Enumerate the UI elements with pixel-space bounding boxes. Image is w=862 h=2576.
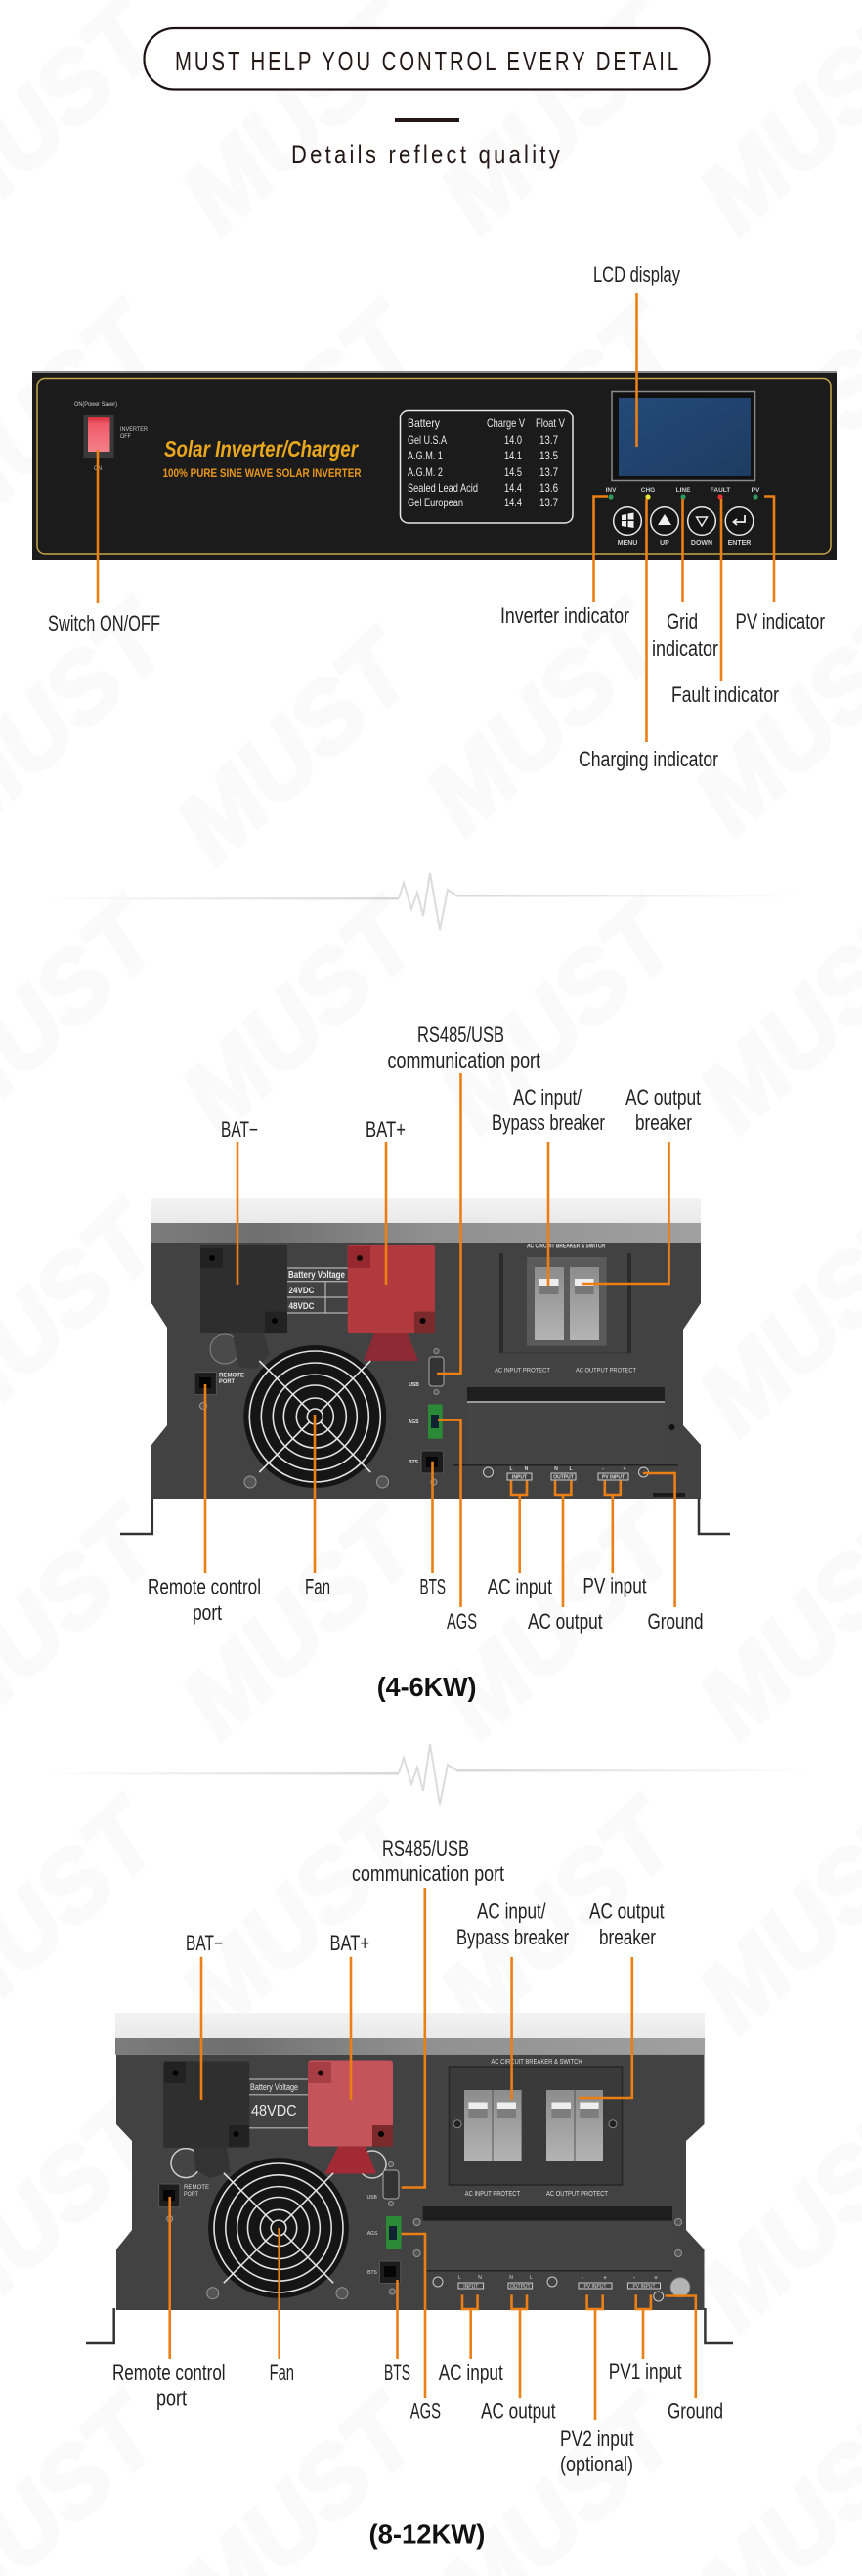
control buttons: DOWN (691, 540, 712, 546)
watermark: repeating MUST logo: MUST (160, 1484, 443, 1758)
status indicators: LINE (676, 487, 691, 494)
watermark: repeating MUST logo: MUST (405, 580, 687, 853)
callout: BAT+: BAT+ (330, 1931, 369, 1955)
AC circuit breaker panel: AC INPUT PROTECT (465, 2191, 521, 2198)
callout: Remote control port: port (193, 1600, 222, 1625)
watermark: repeating MUST logo: MUST (419, 1484, 702, 1758)
callout: Inverter indicator: Inverter indicator (500, 603, 629, 628)
section: 8-12KW inverter rear view (86, 2013, 733, 2343)
heading: 4-6KW: (4-6KW) (377, 1672, 477, 1702)
battery table: Charge V (487, 416, 525, 430)
callout: AC output: AC output (481, 2399, 555, 2423)
callout: PV input: PV input (582, 1574, 647, 1597)
watermark: repeating MUST logo: MUST (160, 1777, 443, 2051)
terminal cover (413, 2206, 682, 2272)
product name: Solar Inverter/Charger (164, 436, 359, 461)
title pill (145, 28, 710, 90)
status indicators: PV (752, 487, 760, 494)
AGS terminal (367, 2216, 402, 2249)
callout: AC output (481, 2294, 555, 2423)
rocker switch: OFF (120, 433, 131, 440)
terminal labels: + (624, 1466, 626, 1472)
BAT+ terminal cover (348, 1245, 435, 1361)
callout: AC input / Bypass breaker: AC input/ (477, 1899, 546, 1924)
terminal labels: + (603, 2275, 607, 2282)
callout: Ground: Ground (668, 2399, 723, 2423)
USB RS485 port: USB (367, 2195, 378, 2201)
battery table: 14.4 (504, 496, 522, 509)
status indicators: INV (606, 487, 617, 494)
terminal labels: N (525, 1466, 529, 1472)
callout: PV2 input (optional): (optional) (560, 2452, 633, 2476)
terminal labels (433, 2275, 690, 2301)
callout: AGS: AGS (447, 1609, 477, 1634)
battery table: 14.1 (504, 449, 522, 462)
terminal labels: PV INPUT (583, 2284, 607, 2290)
callout: LCD display: LCD display (593, 262, 680, 286)
USB RS485 port (409, 1349, 444, 1394)
battery voltage label: Battery Voltage (250, 2082, 298, 2092)
callout: AC input / Bypass breaker: Bypass breaker (456, 1925, 569, 1949)
callout: Charging indicator: Charging indicator (579, 747, 718, 771)
AGS terminal: AGS (409, 1419, 419, 1425)
callout: AC output breaker: AC output (589, 1899, 665, 1924)
callout: BAT+: BAT+ (366, 1117, 406, 1142)
BAT- terminal cover (200, 1245, 287, 1369)
terminal labels: - (582, 2275, 584, 2282)
inverter body (115, 2013, 705, 2310)
AGS terminal (409, 1404, 443, 1439)
callout: BAT-: BAT− (186, 1931, 223, 1955)
callout: AC input / Bypass breaker (492, 1085, 605, 1286)
cooling fan (207, 2158, 349, 2299)
remote port: PORT (219, 1379, 235, 1385)
subtitle: Details reflect quality (291, 140, 563, 169)
BAT+ terminal cover (308, 2061, 393, 2178)
remote port (194, 1373, 244, 1410)
callout: Remote control port (112, 2197, 226, 2411)
callout: AGS: AGS (410, 2399, 441, 2423)
terminal labels: INPUT (512, 1474, 527, 1480)
battery table: 14.4 (504, 481, 522, 495)
callout: Fan: Fan (270, 2360, 294, 2384)
callout: PV1 input (609, 2294, 682, 2383)
terminal labels: PV INPUT (602, 1474, 625, 1480)
callout: AC input / Bypass breaker: Bypass breaker (492, 1111, 605, 1135)
control buttons: UP (660, 540, 669, 546)
callout: RS485/USB communication port: RS485/USB (417, 1023, 504, 1047)
section divider 2 (41, 1744, 813, 1805)
rocker switch: INVERTER (120, 426, 148, 433)
battery table: Battery (408, 416, 440, 430)
control buttons: MENU (618, 540, 637, 546)
callout: AC output breaker (579, 1899, 665, 2098)
watermark: repeating MUST logo: MUST (155, 609, 438, 883)
callout: Remote control port: Remote control (112, 2360, 226, 2384)
BTS port (367, 2261, 401, 2294)
terminal labels: N (509, 2275, 513, 2281)
callout: AC input: AC input (488, 1574, 552, 1599)
battery table: 13.6 (539, 481, 558, 495)
callout: PV indicator (735, 497, 825, 633)
USB RS485 port: USB (409, 1382, 419, 1388)
remote port (159, 2184, 209, 2222)
callout: AC input / Bypass breaker: AC input/ (513, 1085, 582, 1110)
callout: PV2 input (optional) (560, 2294, 633, 2476)
battery voltage label (287, 1268, 348, 1313)
callout: BTS (384, 2280, 410, 2384)
callout: BAT-: BAT− (221, 1117, 258, 1142)
AC circuit breaker panel (495, 1244, 636, 1375)
callout: AC output (528, 1481, 602, 1634)
status indicators (606, 487, 760, 500)
BTS port (409, 1451, 444, 1485)
watermark: repeating MUST logo: MUST (419, 1777, 702, 2051)
callout: RS485/USB communication port: RS485/USB (382, 1836, 469, 1860)
AC circuit breaker panel: AC CIRCUIT BREAKER & SWITCH (527, 1244, 605, 1249)
remote port: REMOTE (184, 2185, 209, 2191)
battery table: Gel U.S.A (408, 433, 447, 447)
panel: inverter front panel (32, 371, 837, 560)
terminal labels: L (569, 1466, 573, 1472)
callout: AC input (488, 1481, 552, 1599)
watermark: repeating MUST logo: MUST (419, 878, 702, 1152)
battery table: A.G.M. 1 (408, 449, 443, 462)
terminal labels: L (509, 1466, 513, 1472)
terminal labels: N (554, 1466, 558, 1472)
terminal labels: N (478, 2275, 482, 2281)
status indicators: FAULT (711, 487, 730, 494)
heading: 8-12KW: (8-12KW) (369, 2519, 485, 2550)
terminal labels: + (654, 2275, 658, 2282)
watermark: repeating MUST logo: MUST (160, 878, 443, 1152)
callout: Ground (643, 1473, 704, 1634)
AGS terminal: AGS (367, 2231, 378, 2237)
terminal labels: OUTPUT (510, 2284, 531, 2290)
battery table: 14.0 (504, 433, 522, 447)
battery table: 13.7 (539, 465, 558, 479)
callout: PV indicator: PV indicator (735, 609, 825, 633)
battery table: Sealed Lead Acid (408, 481, 478, 495)
callout: Grid indicator (652, 499, 718, 661)
terminal labels: L (530, 2275, 533, 2281)
AC circuit breaker panel: AC OUTPUT PROTECT (576, 1368, 636, 1375)
callout: RS485/USB communication port (387, 1023, 540, 1374)
callout: AC input (439, 2294, 503, 2384)
watermark: repeating MUST logo: MUST (419, 282, 702, 555)
cooling fan (243, 1345, 389, 1488)
BTS port: BTS (409, 1460, 419, 1465)
remote port: REMOTE (219, 1373, 244, 1378)
terminal cover (453, 1387, 678, 1466)
callout: Switch ON/OFF: Switch ON/OFF (48, 611, 160, 635)
terminal labels: PV INPUT (632, 2284, 656, 2290)
battery table (401, 411, 573, 523)
terminal labels: L (458, 2275, 461, 2281)
callout: Remote control port: Remote control (148, 1574, 261, 1599)
AC circuit breaker panel: AC CIRCUIT BREAKER & SWITCH (491, 2059, 582, 2066)
callout: Remote control port (148, 1384, 261, 1625)
battery table: 14.5 (504, 465, 522, 479)
callout: Ground: Ground (647, 1609, 704, 1634)
callout: Grid indicator: indicator (652, 636, 718, 661)
battery voltage label: 24VDC (289, 1286, 315, 1295)
battery table: Float V (536, 416, 565, 430)
product name (162, 436, 362, 480)
callout: AC input / Bypass breaker (456, 1899, 569, 2100)
inverter body (151, 1198, 701, 1499)
callout: Remote control port: port (156, 2386, 187, 2411)
callout: PV1 input: PV1 input (609, 2359, 682, 2383)
battery voltage label: 48VDC (251, 2103, 297, 2119)
rocker switch: ON(Power Saver) (74, 402, 117, 408)
battery voltage label: Battery Voltage (288, 1270, 345, 1281)
BTS port: BTS (367, 2270, 378, 2276)
battery table: 13.7 (539, 496, 558, 509)
control buttons (614, 507, 754, 546)
terminal labels: OUTPUT (553, 1474, 574, 1480)
battery table: 13.7 (539, 433, 558, 447)
callout: BTS: BTS (420, 1574, 446, 1599)
mounting feet (120, 1499, 730, 1534)
callout: AC output breaker: breaker (599, 1925, 656, 1949)
USB RS485 port (367, 2162, 399, 2205)
AC circuit breaker panel: AC INPUT PROTECT (495, 1368, 550, 1375)
watermark: repeating MUST logo: MUST (160, 282, 443, 555)
callout: AC output: AC output (528, 1609, 602, 1634)
rocker switch (74, 402, 148, 472)
AC circuit breaker panel: AC OUTPUT PROTECT (546, 2191, 609, 2198)
battery table: A.G.M. 2 (408, 465, 443, 479)
section divider 1 (41, 873, 813, 930)
callout: AC output breaker: breaker (635, 1111, 692, 1135)
callout: AGS (438, 1420, 477, 1634)
battery table: 13.5 (539, 449, 558, 462)
callout: AC output breaker (582, 1085, 701, 1284)
terminal labels: INPUT (463, 2284, 478, 2290)
control buttons: ENTER (728, 540, 751, 546)
callout: BTS: BTS (384, 2360, 410, 2384)
remote port: PORT (184, 2192, 198, 2198)
battery table: Gel European (408, 496, 463, 509)
callout: AC input: AC input (439, 2360, 503, 2384)
short divider bar (395, 118, 459, 122)
terminal labels: - (633, 2275, 636, 2282)
callout: RS485/USB communication port: communication port (387, 1048, 540, 1072)
LCD screen (612, 391, 754, 481)
battery voltage label (249, 2079, 308, 2128)
callout: Fan: Fan (305, 1574, 330, 1599)
callout: RS485/USB communication port (352, 1836, 504, 2188)
callout: Ground (665, 2295, 723, 2423)
callout: RS485/USB communication port: communication port (352, 1861, 504, 1886)
callout: Fault indicator: Fault indicator (671, 682, 779, 707)
terminal labels: - (602, 1466, 604, 1472)
callout: PV2 input (optional): PV2 input (560, 2426, 633, 2451)
status indicators: CHG (641, 487, 655, 494)
callout: AGS (402, 2234, 441, 2423)
title pill: MUST HELP YOU CONTROL EVERY DETAIL (175, 46, 681, 76)
callout: AC output breaker: AC output (625, 1085, 701, 1110)
battery voltage label: 48VDC (289, 1301, 315, 1311)
callout: PV input (582, 1481, 647, 1597)
terminal labels (483, 1466, 685, 1497)
callout: Inverter indicator (500, 497, 629, 628)
rocker switch: ON (94, 465, 102, 472)
mounting feet (86, 2308, 733, 2343)
product name: 100% PURE SINE WAVE SOLAR INVERTER (162, 468, 362, 480)
section: 4-6KW inverter rear view (120, 1198, 730, 1534)
AC circuit breaker panel (450, 2059, 622, 2198)
callout: Grid indicator: Grid (667, 609, 698, 633)
BAT- terminal cover (163, 2061, 249, 2178)
